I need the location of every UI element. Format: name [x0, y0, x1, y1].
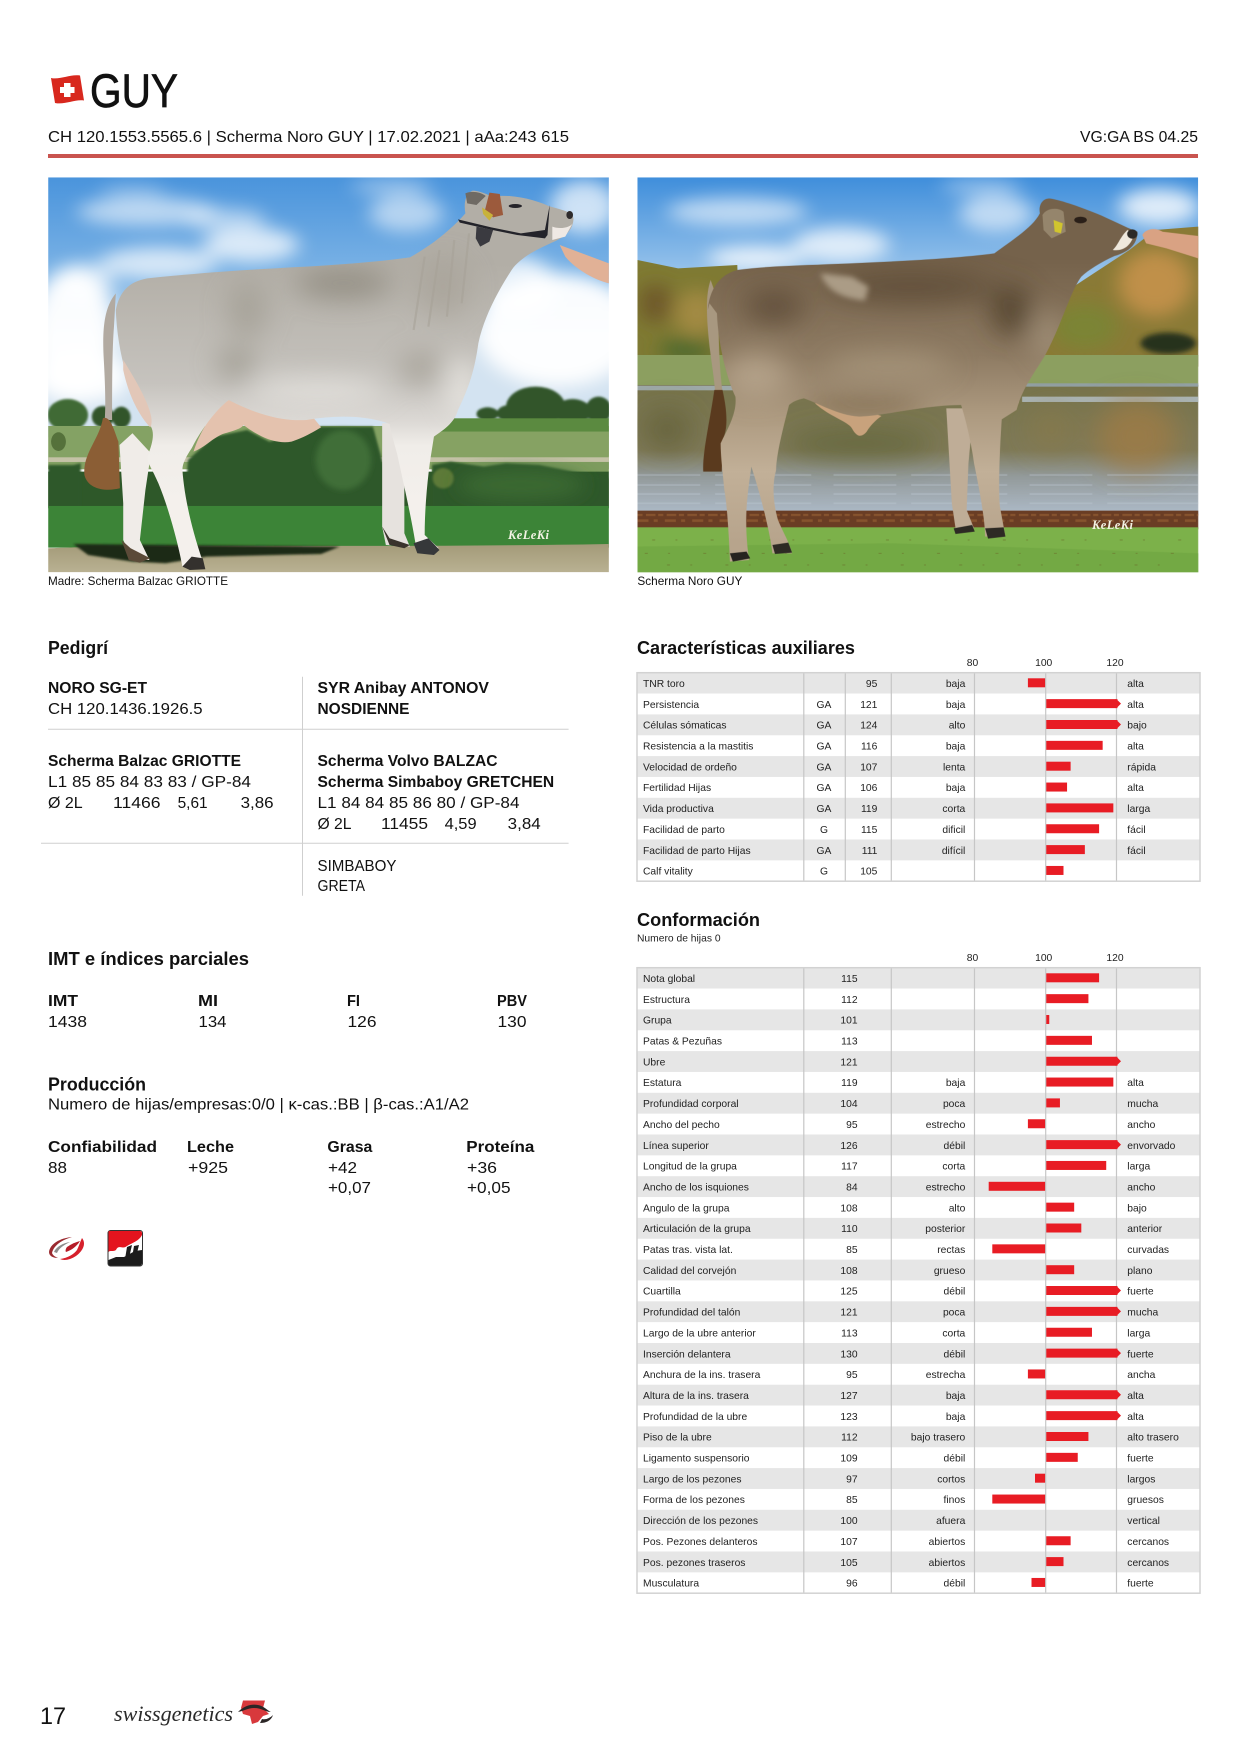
row: Facilidad de parto Hijas — [637, 840, 1200, 860]
row: Dirección de los pezones: afuera — [936, 1516, 966, 1527]
panel: IMT and partial indices: FI — [347, 993, 360, 1010]
heading: auxiliary traits: Características auxiliares — [637, 638, 855, 658]
row: Facilidad de parto Hijas: 111 — [862, 846, 878, 857]
photo credit: KeLeKi — [507, 528, 550, 542]
row: Células sómaticas — [637, 714, 1200, 735]
axis: conformation scale: 120 — [1106, 953, 1124, 964]
row: Vida productiva — [637, 798, 1200, 819]
row: Piso de la ubre: 112 — [841, 1433, 858, 1444]
row: Ancho del pecho: Ancho del pecho — [643, 1120, 720, 1131]
row: Dirección de los pezones: vertical — [1127, 1516, 1160, 1527]
table: conformation — [637, 968, 1200, 1593]
row: Patas tras. vista lat.: Patas tras. vista lat. — [643, 1245, 733, 1256]
panel: production: +36 — [467, 1160, 497, 1177]
row: Velocidad de ordeño: rápida — [1127, 762, 1156, 773]
row: Vida productiva: 119 — [861, 804, 878, 815]
far trees — [47, 387, 611, 431]
row: Inserción delantera: débil — [944, 1349, 965, 1360]
row: Estatura: alta — [1127, 1078, 1144, 1089]
caption: bull: Scherma Noro GUY — [637, 574, 742, 588]
row: Resistencia a la mastitis: 116 — [861, 742, 878, 753]
row: Longitud de la grupa: corta — [942, 1162, 966, 1173]
row: Ancho de los isquiones: estrecho — [926, 1182, 966, 1193]
row: Pos. pezones traseros — [637, 1552, 1200, 1572]
row: Profundidad corporal: 104 — [840, 1099, 858, 1110]
sheath — [815, 400, 882, 436]
panel: production: +0,07 — [328, 1180, 371, 1197]
row: Resistencia a la mastitis: Resistencia a la mastitis — [643, 742, 753, 753]
panel: production: +42 — [328, 1160, 357, 1177]
panel: pedigree: Pedigrí — [48, 638, 109, 658]
row: Estructura: 112 — [841, 995, 858, 1006]
row: Longitud de la grupa: Longitud de la grupa — [643, 1162, 737, 1173]
row: Ubre: 121 — [840, 1057, 858, 1068]
row: Anchura de la ins. trasera: estrecha — [926, 1370, 966, 1381]
row: Patas & Pezuñas — [643, 1036, 1092, 1048]
panel: pedigree: CH 120.1436.1926.5 — [48, 701, 203, 718]
row: Línea superior: Línea superior — [643, 1141, 709, 1152]
row: Anchura de la ins. trasera: 95 — [846, 1370, 858, 1381]
row: Pos. pezones traseros: Pos. pezones traseros — [643, 1558, 745, 1569]
subtitle: identification line: CH 120.1553.5565.6 | Scherma Noro GUY | 17.02.2021 | aAa:243 615 — [48, 129, 569, 146]
axis: conformation scale: 100 — [1035, 953, 1053, 964]
row: Musculatura: Musculatura — [643, 1579, 699, 1590]
row: Profundidad de la ubre: alta — [1127, 1412, 1144, 1423]
row: Ancho del pecho — [643, 1119, 1156, 1131]
panel: IMT and partial indices — [48, 949, 527, 1031]
panel: pedigree: Scherma Volvo BALZAC — [318, 753, 498, 770]
row: Persistencia: alta — [1127, 700, 1144, 711]
row: Pos. Pezones delanteros — [643, 1536, 1169, 1548]
panel: production — [48, 1074, 534, 1197]
udder — [194, 400, 321, 452]
row: Calf vitality: Calf vitality — [643, 867, 694, 878]
row: Forma de los pezones: finos — [944, 1495, 965, 1506]
axis: auxiliary scale — [967, 658, 1124, 669]
row: Velocidad de ordeño: Velocidad de ordeño — [643, 762, 737, 773]
panel: production: +925 — [188, 1160, 228, 1177]
panel: IMT and partial indices: 126 — [348, 1014, 377, 1031]
row: Piso de la ubre: bajo trasero — [911, 1433, 966, 1444]
row: Largo de los pezones — [637, 1468, 1200, 1489]
row: Articulación de la grupa: 110 — [841, 1224, 858, 1235]
row: Largo de los pezones: largos — [1127, 1474, 1155, 1485]
red header rule — [48, 154, 1198, 158]
footer brand name: swissgenetics — [114, 1701, 233, 1726]
panel: IMT and partial indices: PBV — [497, 993, 527, 1010]
head details — [485, 193, 503, 217]
axis: auxiliary scale: 120 — [1106, 658, 1124, 669]
panel: pedigree: Scherma Simbaboy GRETCHEN — [318, 774, 554, 791]
row: Largo de la ubre anterior: corta — [942, 1328, 966, 1339]
panel: pedigree: 4,59 — [445, 816, 477, 833]
far front leg — [946, 408, 974, 528]
classification text: VG:GA BS 04.25 — [1080, 129, 1198, 146]
row: Forma de los pezones: Forma de los pezones — [643, 1495, 745, 1506]
row: Vida productiva: Vida productiva — [643, 804, 714, 815]
tail — [707, 280, 722, 392]
panel: pedigree — [41, 638, 569, 896]
body — [708, 198, 1138, 562]
row: Vida productiva: corta — [942, 804, 966, 815]
row: Cuartilla: 125 — [840, 1287, 858, 1298]
panel: pedigree: L1 84 84 85 86 80 / GP-84 — [318, 795, 520, 812]
row: Pos. pezones traseros: 105 — [840, 1558, 858, 1569]
axis: auxiliary scale: 80 — [967, 658, 978, 669]
row: Largo de la ubre anterior: larga — [1127, 1328, 1150, 1339]
row: Fertilidad Hijas: Fertilidad Hijas — [643, 783, 711, 794]
row: Anchura de la ins. trasera: ancha — [1127, 1370, 1156, 1381]
row: Nota global — [637, 968, 1200, 989]
row: Largo de la ubre anterior: Largo de la ubre anterior — [643, 1328, 756, 1339]
row: Ubre — [637, 1051, 1200, 1072]
row: TNR toro: alta — [1127, 679, 1144, 690]
panel: IMT and partial indices: 134 — [198, 1014, 227, 1031]
hooves — [182, 557, 205, 570]
row: TNR toro: baja — [946, 679, 966, 690]
row: Estatura — [643, 1078, 1144, 1089]
row: Células sómaticas: Células sómaticas — [643, 721, 727, 732]
row: Ligamento suspensorio: fuerte — [1127, 1454, 1154, 1465]
row: Ancho de los isquiones: ancho — [1127, 1182, 1156, 1193]
panel: IMT and partial indices: IMT e índices parciales — [48, 949, 249, 969]
title: GUY — [90, 64, 178, 117]
row: Fertilidad Hijas: baja — [946, 783, 966, 794]
photo: bull Scherma Noro GUY — [637, 177, 1200, 572]
row: Nota global: Nota global — [643, 974, 695, 985]
row: Dirección de los pezones: Dirección de los pezones — [643, 1516, 758, 1527]
panel: pedigree: GRETA — [318, 878, 365, 895]
row: Resistencia a la mastitis: alta — [1127, 742, 1144, 753]
photo: mother cow Scherma Balzac GRIOTTE — [33, 177, 639, 572]
row: Angulo de la grupa: bajo — [1127, 1203, 1147, 1214]
panel: IMT and partial indices: 130 — [498, 1014, 527, 1031]
row: Velocidad de ordeño — [637, 756, 1200, 777]
row: Articulación de la grupa: Articulación de la grupa — [643, 1224, 751, 1235]
row: Línea superior: débil — [944, 1141, 965, 1152]
row: Profundidad del talón — [637, 1301, 1200, 1322]
row: Forma de los pezones — [643, 1495, 1164, 1506]
row: Altura de la ins. trasera: baja — [946, 1391, 966, 1402]
row: Vida productiva: larga — [1127, 804, 1150, 815]
row: Pos. pezones traseros: abiertos — [929, 1558, 965, 1569]
row: Dirección de los pezones: 100 — [840, 1516, 858, 1527]
row: Calf vitality: G — [820, 867, 828, 878]
panel: pedigree: Ø 2L — [318, 816, 352, 833]
panel: pedigree: 3,84 — [508, 816, 541, 833]
row: Línea superior: 126 — [840, 1141, 858, 1152]
axis: conformation scale: 80 — [967, 953, 978, 964]
panel: pedigree: 11466 — [113, 795, 161, 812]
row: Facilidad de parto: G — [820, 825, 828, 836]
row: Largo de los pezones: 97 — [846, 1474, 858, 1485]
row: Angulo de la grupa: alto — [949, 1203, 966, 1214]
row: Angulo de la grupa — [643, 1203, 1147, 1214]
row: Profundidad corporal: poca — [943, 1099, 966, 1110]
row: Facilidad de parto Hijas: fácil — [1127, 846, 1146, 857]
panel: IMT and partial indices: 1438 — [48, 1014, 87, 1031]
row: Profundidad corporal: Profundidad corporal — [643, 1099, 739, 1110]
heading: conformation: Conformación — [637, 910, 760, 930]
panel: production: Confiabilidad — [48, 1139, 157, 1156]
row: Células sómaticas: bajo — [1127, 721, 1147, 732]
panel: production: Proteína — [466, 1139, 534, 1156]
row: Largo de la ubre anterior — [643, 1328, 1150, 1339]
row: Piso de la ubre: Piso de la ubre — [643, 1433, 712, 1444]
row: Profundidad corporal — [637, 1093, 1200, 1114]
row: Ancho de los isquiones — [637, 1176, 1200, 1197]
row: Facilidad de parto — [643, 824, 1146, 836]
row: Profundidad del talón: 121 — [840, 1308, 858, 1319]
caption: mother: Madre: Scherma Balzac GRIOTTE — [48, 574, 228, 588]
row: Altura de la ins. trasera: Altura de la ins. trasera — [643, 1391, 749, 1402]
row: Velocidad de ordeño: GA — [817, 762, 832, 773]
row: Profundidad del talón: Profundidad del talón — [643, 1308, 741, 1319]
panel: production: Producción — [48, 1074, 146, 1094]
row: Angulo de la grupa: Angulo de la grupa — [643, 1203, 730, 1214]
panel: pedigree: 3,86 — [241, 795, 274, 812]
row: Patas & Pezuñas: Patas & Pezuñas — [643, 1037, 722, 1048]
row: Fertilidad Hijas: GA — [817, 783, 832, 794]
panel: pedigree: 11455 — [381, 816, 428, 833]
row: Grupa — [637, 1009, 1200, 1030]
row: Cuartilla — [643, 1286, 1154, 1298]
body shading — [722, 270, 1059, 414]
panel: IMT and partial indices: MI — [198, 993, 218, 1010]
row: Pos. Pezones delanteros: abiertos — [929, 1537, 965, 1548]
row: Inserción delantera: 130 — [840, 1349, 858, 1360]
icon: red and black square logo — [108, 1230, 142, 1266]
row: Resistencia a la mastitis: baja — [946, 742, 966, 753]
row: TNR toro — [637, 673, 1200, 694]
row: Persistencia — [643, 699, 1144, 711]
row: Persistencia: 121 — [860, 700, 878, 711]
row: Resistencia a la mastitis: GA — [817, 742, 832, 753]
row: Resistencia a la mastitis — [643, 741, 1144, 753]
axis: conformation scale — [967, 953, 1124, 964]
head details — [1042, 209, 1066, 238]
row: Anchura de la ins. trasera — [643, 1369, 1156, 1381]
tail — [103, 293, 116, 420]
panel: pedigree: SYR Anibay ANTONOV — [318, 680, 489, 697]
row: Estructura — [643, 994, 1088, 1006]
row: Profundidad de la ubre — [643, 1411, 1144, 1423]
row: Estructura: Estructura — [643, 995, 690, 1006]
panel: pedigree: Scherma Balzac GRIOTTE — [48, 753, 241, 770]
row: Largo de los pezones: cortos — [937, 1474, 965, 1485]
row: Calidad del corvejón: 108 — [840, 1266, 858, 1277]
row: Ancho del pecho: 95 — [846, 1120, 858, 1131]
panel: production: Numero de hijas/empresas:0/0 | κ-cas.:BB | β-cas.:A1/A2 — [48, 1096, 469, 1114]
panel: production: 88 — [48, 1160, 67, 1177]
row: Piso de la ubre: alto trasero — [1127, 1433, 1179, 1444]
panel: production: +0,05 — [467, 1180, 511, 1197]
row: Velocidad de ordeño: lenta — [943, 762, 966, 773]
icon: Swiss flag — [51, 75, 84, 103]
panel: pedigree: NORO SG-ET — [48, 680, 147, 697]
row: Línea superior — [637, 1134, 1200, 1155]
row: Velocidad de ordeño: 107 — [860, 762, 878, 773]
row: Calidad del corvejón: plano — [1127, 1266, 1153, 1277]
row: TNR toro: TNR toro — [643, 679, 685, 690]
row: Células sómaticas: 124 — [860, 721, 878, 732]
row: Longitud de la grupa — [643, 1161, 1150, 1173]
row: Ligamento suspensorio: débil — [944, 1454, 965, 1465]
body — [116, 191, 573, 567]
row: Forma de los pezones: 85 — [846, 1495, 858, 1506]
row: Grupa: Grupa — [643, 1016, 672, 1027]
row: Fertilidad Hijas: alta — [1127, 783, 1144, 794]
row: Dirección de los pezones — [637, 1510, 1200, 1531]
row: Facilidad de parto Hijas: GA — [817, 846, 832, 857]
page number: 17 — [40, 1703, 66, 1730]
row: Patas tras. vista lat.: curvadas — [1127, 1245, 1169, 1256]
row: Facilidad de parto: dificil — [942, 825, 965, 836]
row: Profundidad corporal: mucha — [1127, 1099, 1158, 1110]
icon: swissgenetics logo — [238, 1700, 273, 1724]
row: Profundidad del talón: mucha — [1127, 1308, 1158, 1319]
row: Profundidad de la ubre: 123 — [840, 1412, 858, 1423]
row: Angulo de la grupa: 108 — [840, 1203, 858, 1214]
row: Persistencia: GA — [817, 700, 832, 711]
far legs — [120, 433, 151, 560]
row: Ancho del pecho: estrecho — [926, 1120, 966, 1131]
row: Nota global: 115 — [841, 974, 858, 985]
row: Calf vitality: 105 — [860, 867, 878, 878]
panel: production: Leche — [187, 1139, 234, 1156]
row: Ligamento suspensorio: 109 — [840, 1454, 858, 1465]
row: Musculatura — [643, 1578, 1154, 1590]
row: Patas tras. vista lat. — [643, 1244, 1169, 1256]
row: Ubre: Ubre — [643, 1057, 666, 1068]
row: Fertilidad Hijas: 106 — [860, 783, 878, 794]
icon: swirl logo — [49, 1237, 84, 1260]
panel: production: Grasa — [327, 1139, 372, 1156]
row: Articulación de la grupa: anterior — [1127, 1224, 1163, 1235]
row: Musculatura: 96 — [846, 1579, 858, 1590]
row: Articulación de la grupa: posterior — [925, 1224, 966, 1235]
panel: pedigree: L1 85 85 84 83 83 / GP-84 — [48, 774, 251, 791]
row: Musculatura: débil — [944, 1579, 965, 1590]
hedge — [48, 472, 609, 508]
row: Estatura: Estatura — [643, 1078, 682, 1089]
row: Pos. Pezones delanteros: cercanos — [1127, 1537, 1169, 1548]
row: Largo de los pezones: Largo de los pezones — [643, 1474, 741, 1485]
row: Altura de la ins. trasera: alta — [1127, 1391, 1144, 1402]
row: Patas tras. vista lat.: rectas — [937, 1245, 965, 1256]
row: Persistencia: Persistencia — [643, 700, 699, 711]
row: Células sómaticas: alto — [949, 721, 966, 732]
row: Forma de los pezones: gruesos — [1127, 1495, 1164, 1506]
row: Cuartilla: Cuartilla — [643, 1287, 681, 1298]
row: Grupa: 101 — [840, 1016, 858, 1027]
panel: pedigree: 5,61 — [178, 795, 208, 812]
panel: pedigree: SIMBABOY — [318, 858, 397, 875]
row: Pos. Pezones delanteros: 107 — [840, 1537, 858, 1548]
row: Fertilidad Hijas — [643, 783, 1144, 794]
row: Ligamento suspensorio: Ligamento suspensorio — [643, 1454, 750, 1465]
row: Persistencia: baja — [946, 700, 966, 711]
row: Musculatura: fuerte — [1127, 1579, 1154, 1590]
row: Estatura: baja — [946, 1078, 966, 1089]
row: Cuartilla: débil — [944, 1287, 965, 1298]
photo credit: KeLeKi — [1091, 518, 1134, 532]
row: Profundidad del talón: poca — [943, 1308, 966, 1319]
row: Piso de la ubre — [637, 1426, 1200, 1447]
row: Facilidad de parto: fácil — [1127, 825, 1146, 836]
row: Patas tras. vista lat.: 85 — [846, 1245, 858, 1256]
row: Calidad del corvejón: grueso — [934, 1266, 966, 1277]
row: Facilidad de parto: 115 — [861, 825, 878, 836]
row: Inserción delantera: fuerte — [1127, 1349, 1154, 1360]
row: Profundidad de la ubre: baja — [946, 1412, 966, 1423]
row: Vida productiva: GA — [817, 804, 832, 815]
panel: IMT and partial indices: IMT — [48, 993, 78, 1010]
row: Inserción delantera — [637, 1343, 1200, 1364]
row: Anchura de la ins. trasera: Anchura de la ins. trasera — [643, 1370, 761, 1381]
row: Largo de la ubre anterior: 113 — [841, 1328, 858, 1339]
row: Pos. Pezones delanteros: Pos. Pezones delanteros — [643, 1537, 757, 1548]
row: Facilidad de parto Hijas: Facilidad de parto Hijas — [643, 846, 751, 857]
row: Pos. pezones traseros: cercanos — [1127, 1558, 1169, 1569]
row: Inserción delantera: Inserción delantera — [643, 1349, 731, 1360]
row: TNR toro: 95 — [866, 679, 878, 690]
autumn trees — [638, 260, 738, 355]
row: Ligamento suspensorio — [643, 1453, 1154, 1465]
row: Altura de la ins. trasera — [637, 1385, 1200, 1406]
row: Longitud de la grupa: 117 — [841, 1162, 858, 1173]
row: Ancho de los isquiones: Ancho de los isquiones — [643, 1182, 749, 1193]
row: Facilidad de parto: Facilidad de parto — [643, 825, 725, 836]
row: Calf vitality — [643, 866, 1064, 878]
panel: pedigree: Ø 2L — [48, 795, 83, 812]
row: Profundidad de la ubre: Profundidad de la ubre — [643, 1412, 747, 1423]
row: Altura de la ins. trasera: 127 — [840, 1391, 858, 1402]
body shading — [218, 233, 475, 417]
row: Calidad del corvejón — [637, 1260, 1200, 1280]
row: Patas & Pezuñas: 113 — [841, 1037, 858, 1048]
axis: auxiliary scale: 100 — [1035, 658, 1053, 669]
note: number of daughters: Numero de hijas 0 — [637, 934, 721, 944]
row: Facilidad de parto Hijas: difícil — [942, 846, 965, 857]
row: Células sómaticas: GA — [817, 721, 832, 732]
row: Línea superior: envorvado — [1127, 1141, 1176, 1152]
row: Calidad del corvejón: Calidad del corvejón — [643, 1266, 737, 1277]
row: Ancho de los isquiones: 84 — [846, 1182, 858, 1193]
row: Ancho del pecho: ancho — [1127, 1120, 1156, 1131]
row: Estatura: 119 — [841, 1078, 858, 1089]
panel: pedigree: NOSDIENNE — [318, 701, 410, 718]
row: Longitud de la grupa: larga — [1127, 1162, 1150, 1173]
row: Articulación de la grupa — [637, 1218, 1200, 1239]
table: auxiliary traits — [637, 673, 1200, 881]
row: Cuartilla: fuerte — [1127, 1287, 1154, 1298]
hooves — [730, 552, 750, 562]
